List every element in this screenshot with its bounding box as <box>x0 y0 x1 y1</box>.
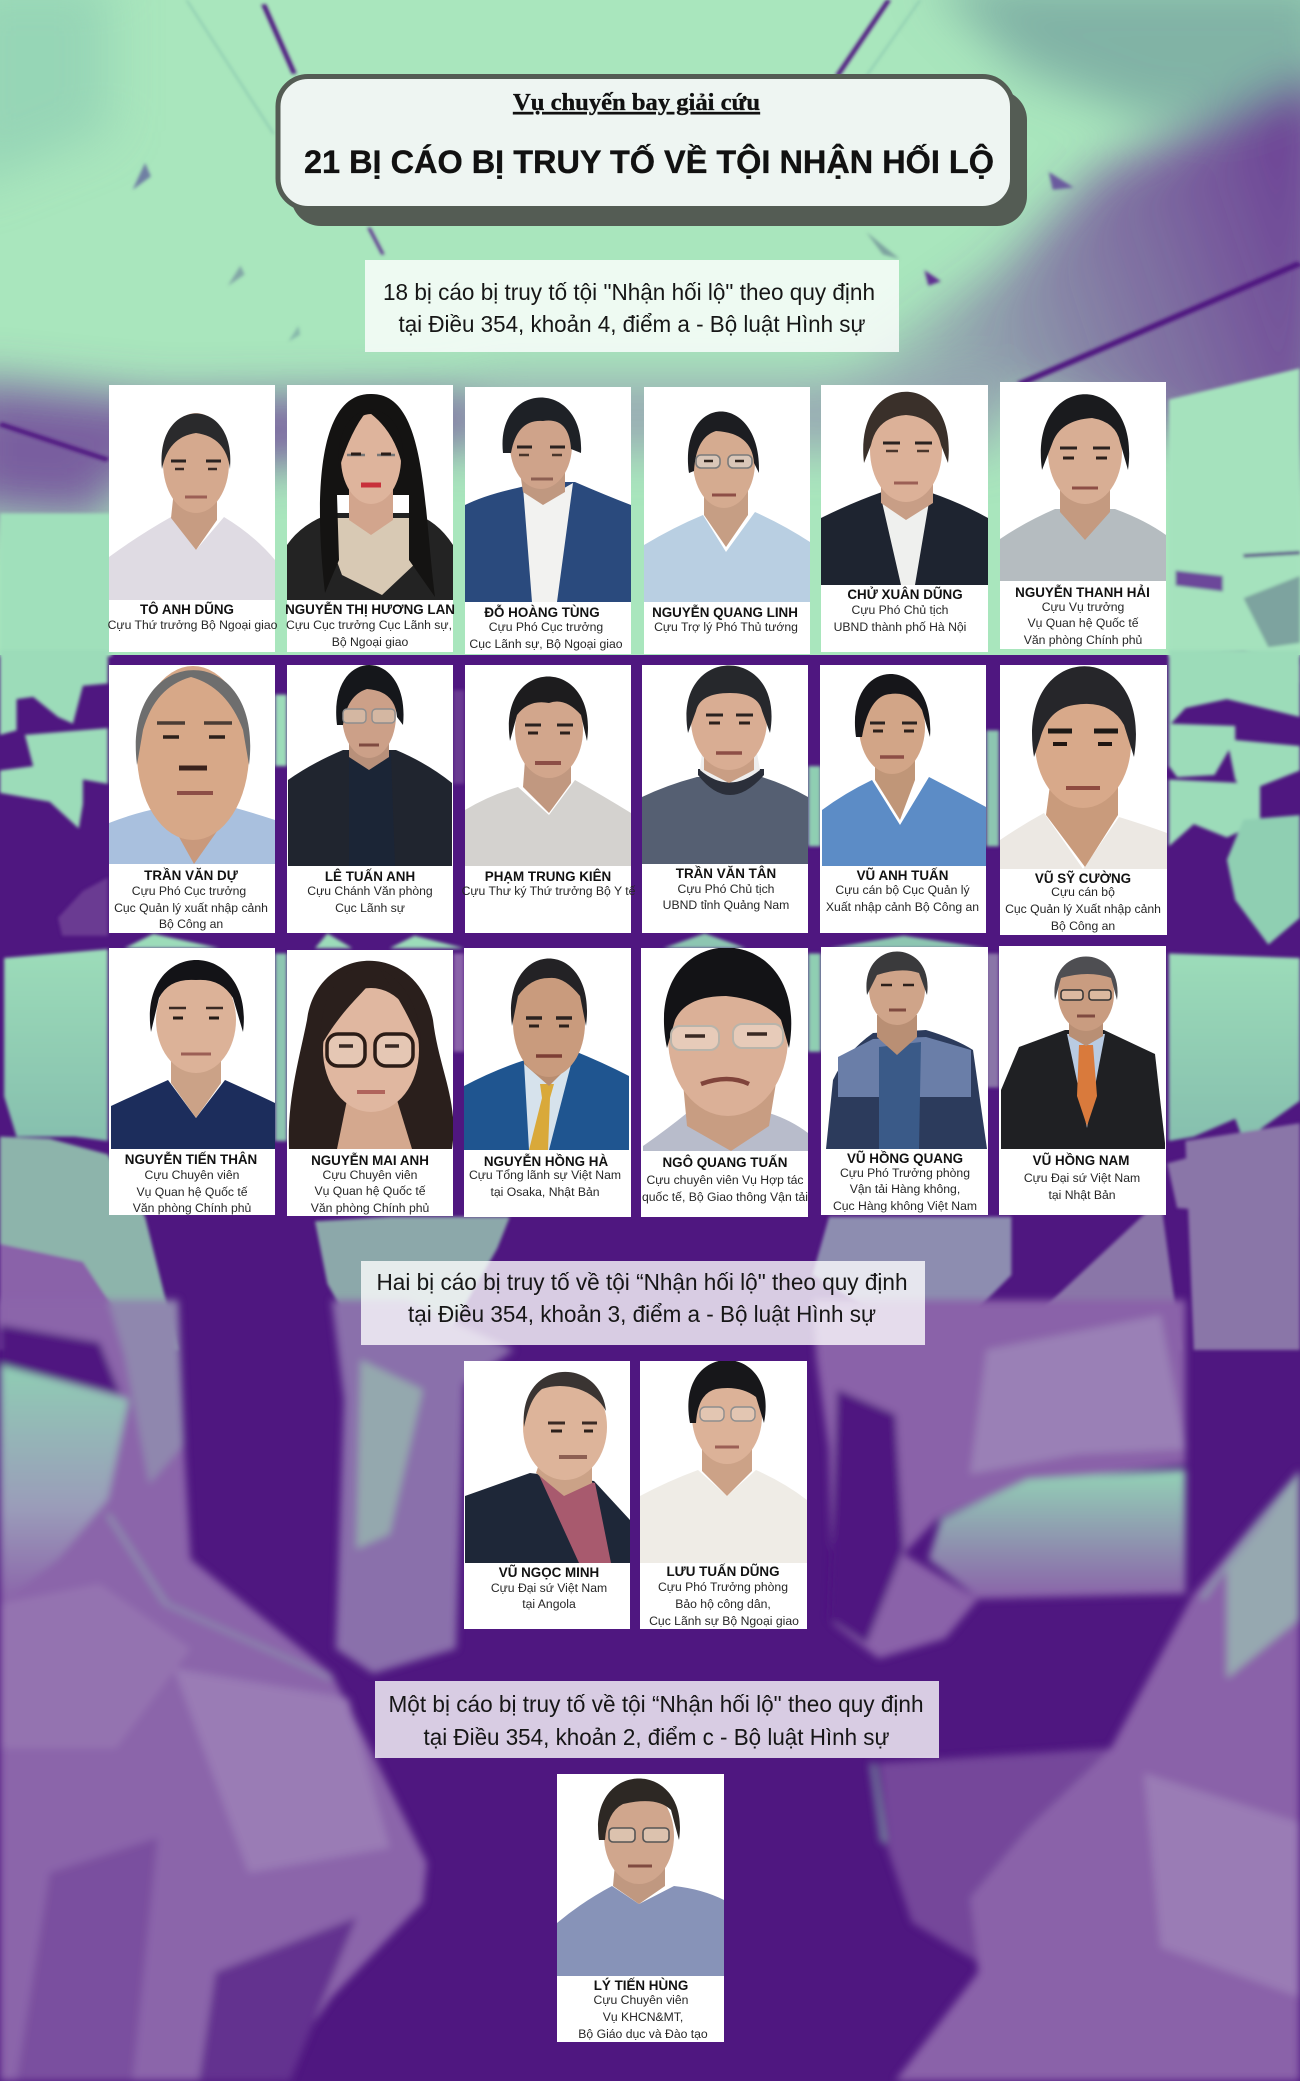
card: Nguyễn Mai Anh <box>287 950 453 1216</box>
card: Trần Văn Tân <box>642 665 808 933</box>
card: Nguyễn Hồng Hà: NGUYỄN HỒNG HÀ <box>484 1154 608 1169</box>
card: Vũ Hồng Quang: VŨ HỒNG QUANG <box>847 1151 963 1166</box>
portrait <box>109 413 275 600</box>
portrait <box>1000 394 1166 581</box>
section banner: one defendant: tại Điều 354, khoản 2, điểm c - Bộ luật Hình sự <box>424 1724 890 1750</box>
portrait <box>465 1372 630 1563</box>
role: Vụ Quan hệ Quốc tế <box>314 1184 426 1198</box>
card: Lưu Tuấn Dũng <box>640 1360 807 1629</box>
role: Văn phòng Chính phủ <box>1024 633 1142 647</box>
card: Lý Tiến Hùng: LÝ TIẾN HÙNG <box>594 1978 688 1993</box>
role <box>578 1993 708 2041</box>
section banner: one defendant <box>375 1681 939 1758</box>
card: Lê Tuấn Anh <box>287 665 453 933</box>
role: Cục Hàng không Việt Nam <box>833 1199 977 1213</box>
role <box>133 1168 251 1215</box>
card: Vũ Sỹ Cường: VŨ SỸ CƯỜNG <box>1035 871 1131 886</box>
role: Cục Quản lý Xuất nhập cảnh <box>1005 902 1161 916</box>
role: Vụ Quan hệ Quốc tế <box>136 1185 248 1199</box>
card: Nguyễn Quang Linh <box>644 387 810 654</box>
card: Nguyễn Mai Anh: NGUYỄN MAI ANH <box>311 1153 429 1168</box>
card: Vũ Sỹ Cường <box>1000 665 1167 935</box>
role: UBND thành phố Hà Nội <box>834 620 966 634</box>
role <box>834 603 966 634</box>
portrait <box>1001 956 1165 1149</box>
role <box>286 618 452 649</box>
card: Tô Anh Dũng: Cựu Thứ trưởng Bộ Ngoại giao <box>108 618 278 632</box>
role: Cựu Tổng lãnh sự Việt Nam <box>469 1168 621 1182</box>
card: Nguyễn Thanh Hải <box>1000 382 1166 649</box>
kicker: Vụ chuyến bay giải cứu: Vụ chuyến bay giải cứu <box>513 90 760 116</box>
role: Cựu chuyên viên Vụ Hợp tác <box>646 1173 804 1187</box>
card: Vũ Ngọc Minh: VŨ NGỌC MINH <box>499 1565 599 1580</box>
card: Trần Văn Dự <box>109 665 275 933</box>
section banner: 18 defendants: 18 bị cáo bị truy tố tội "Nhận hối lộ" theo quy định <box>383 279 875 305</box>
card: Chử Xuân Dũng <box>821 385 988 652</box>
role: tại Nhật Bản <box>1048 1188 1116 1202</box>
role: Cựu Phó Cục trưởng <box>132 884 246 898</box>
role: Cựu cán bộ <box>1051 885 1115 899</box>
role: UBND tỉnh Quảng Nam <box>663 898 789 912</box>
card: Đỗ Hoàng Tùng <box>465 387 631 654</box>
card: Tô Anh Dũng <box>108 385 278 652</box>
card: Vũ Hồng Quang <box>821 947 988 1215</box>
portrait <box>288 960 453 1149</box>
role: Cựu Phó Chủ tịch <box>852 603 948 617</box>
portrait <box>822 674 986 866</box>
card: Nguyễn Tiến Thân <box>109 948 275 1215</box>
role <box>469 620 623 651</box>
card: Ngô Quang Tuấn: NGÔ QUANG TUẤN <box>663 1155 787 1170</box>
card: Lý Tiến Hùng <box>557 1774 724 2042</box>
card: Nguyễn Thị Hương Lan <box>285 385 455 652</box>
card: Lê Tuấn Anh: LÊ TUẤN ANH <box>325 869 415 884</box>
role: Cục Quản lý xuất nhập cảnh <box>114 901 268 915</box>
card: Nguyễn Thanh Hải: NGUYỄN THANH HẢI <box>1015 585 1150 600</box>
card: Vũ Anh Tuấn: VŨ ANH TUẤN <box>857 868 948 883</box>
card: Nguyễn Quang Linh: Cựu Trợ lý Phó Thủ tướng <box>654 620 798 634</box>
role: Cựu Cục trưởng Cục Lãnh sự, <box>286 618 452 632</box>
section banner: one defendant: Một bị cáo bị truy tố về tội “Nhận hối lộ" theo quy định <box>388 1691 924 1717</box>
role <box>114 884 268 931</box>
role <box>469 1168 621 1199</box>
card: Vũ Anh Tuấn <box>820 665 986 933</box>
card: Ngô Quang Tuấn <box>641 948 808 1217</box>
section banner: two defendants <box>361 1261 925 1345</box>
portrait <box>464 958 629 1150</box>
card: Đỗ Hoàng Tùng: ĐỖ HOÀNG TÙNG <box>484 605 600 620</box>
portrait <box>640 1361 807 1563</box>
role <box>491 1581 607 1611</box>
card: Nguyễn Tiến Thân: NGUYỄN TIẾN THÂN <box>125 1152 257 1167</box>
card: Trần Văn Tân: TRẦN VĂN TÂN <box>676 866 776 881</box>
title box <box>278 76 1027 226</box>
card: Nguyễn Quang Linh: NGUYỄN QUANG LINH <box>652 605 798 620</box>
role: tại Osaka, Nhật Bản <box>490 1185 600 1199</box>
role: Cựu Đại sứ Việt Nam <box>491 1581 607 1595</box>
portrait <box>642 666 808 864</box>
card: Phạm Trung Kiên: Cựu Thư ký Thứ trưởng Bộ Y tế <box>462 884 636 898</box>
role <box>826 883 979 914</box>
portrait <box>821 392 988 585</box>
portrait <box>288 665 452 866</box>
portrait <box>1000 666 1167 869</box>
card: Vũ Hồng Nam <box>999 946 1166 1215</box>
role: Cựu cán bộ Cục Quản lý <box>835 883 970 897</box>
role: Bộ Giáo dục và Đào tạo <box>578 2027 708 2041</box>
role: Cựu Phó Trưởng phòng <box>658 1580 788 1594</box>
section banner: 18 defendants: tại Điều 354, khoản 4, điểm a - Bộ luật Hình sự <box>398 311 866 337</box>
role: Cựu Chuyên viên <box>594 1993 688 2007</box>
role: Cựu Phó Cục trưởng <box>489 620 603 634</box>
role <box>1024 600 1142 647</box>
card: Vũ Ngọc Minh <box>464 1361 630 1629</box>
role: Vụ Quan hệ Quốc tế <box>1027 616 1139 630</box>
portrait <box>111 960 275 1149</box>
card: Lưu Tuấn Dũng: LƯU TUẤN DŨNG <box>666 1564 780 1579</box>
role: Xuất nhập cảnh Bộ Công an <box>826 900 979 914</box>
card: Vũ Hồng Nam: VŨ HỒNG NAM <box>1033 1153 1129 1168</box>
role: Cựu Phó Trưởng phòng <box>840 1166 970 1180</box>
role: Bộ Công an <box>159 917 223 931</box>
portrait <box>465 398 631 602</box>
portrait <box>465 676 631 866</box>
role: quốc tế, Bộ Giao thông Vận tải <box>642 1190 808 1204</box>
role <box>833 1166 977 1213</box>
role: Văn phòng Chính phủ <box>133 1201 251 1215</box>
role <box>311 1168 429 1215</box>
role: tại Angola <box>522 1597 576 1611</box>
main title: 21 BỊ CÁO BỊ TRUY TỐ VỀ TỘI NHẬN HỐI LỘ <box>304 144 994 180</box>
role: Cựu Đại sứ Việt Nam <box>1024 1171 1140 1185</box>
role: Cục Lãnh sự <box>335 901 405 915</box>
portrait <box>644 412 810 602</box>
portrait <box>826 952 987 1149</box>
role <box>663 882 789 912</box>
role <box>307 884 433 915</box>
card: Nguyễn Thị Hương Lan: NGUYỄN THỊ HƯƠNG LAN <box>285 602 455 617</box>
portrait <box>643 948 808 1151</box>
portrait <box>287 394 453 600</box>
card: Tô Anh Dũng: TÔ ANH DŨNG <box>140 602 234 617</box>
role: Cựu Phó Chủ tịch <box>678 882 774 896</box>
card: Nguyễn Hồng Hà <box>464 948 631 1217</box>
role: Bảo hộ công dân, <box>675 1597 771 1611</box>
card: Chử Xuân Dũng: CHỬ XUÂN DŨNG <box>847 587 963 602</box>
role <box>1024 1171 1140 1202</box>
role <box>649 1580 799 1628</box>
card: Trần Văn Dự: TRẦN VĂN DỰ <box>144 868 239 883</box>
role: Cựu Chuyên viên <box>145 1168 239 1182</box>
role: Vụ KHCN&MT, <box>603 2010 683 2024</box>
portrait <box>557 1778 724 1976</box>
role: Bộ Ngoại giao <box>332 635 408 649</box>
section banner: two defendants: tại Điều 354, khoản 3, điểm a - Bộ luật Hình sự <box>408 1301 876 1327</box>
portrait <box>109 666 275 864</box>
role <box>642 1173 808 1204</box>
role: Văn phòng Chính phủ <box>311 1201 429 1215</box>
role: Cựu Vụ trưởng <box>1042 600 1124 614</box>
role: Bộ Công an <box>1051 919 1115 933</box>
role: Cục Lãnh sự Bộ Ngoại giao <box>649 1614 799 1628</box>
role: Vận tải Hàng không, <box>850 1182 960 1196</box>
card: Phạm Trung Kiên <box>462 665 636 933</box>
role: Cục Lãnh sự, Bộ Ngoại giao <box>469 637 623 651</box>
role: Cựu Chánh Văn phòng <box>307 884 433 898</box>
section banner: 18 defendants <box>365 260 899 352</box>
role: Cựu Chuyên viên <box>323 1168 417 1182</box>
section banner: two defendants: Hai bị cáo bị truy tố về tội “Nhận hối lộ" theo quy định <box>376 1269 908 1295</box>
card: Phạm Trung Kiên: PHẠM TRUNG KIÊN <box>485 869 611 884</box>
role <box>1005 885 1161 933</box>
